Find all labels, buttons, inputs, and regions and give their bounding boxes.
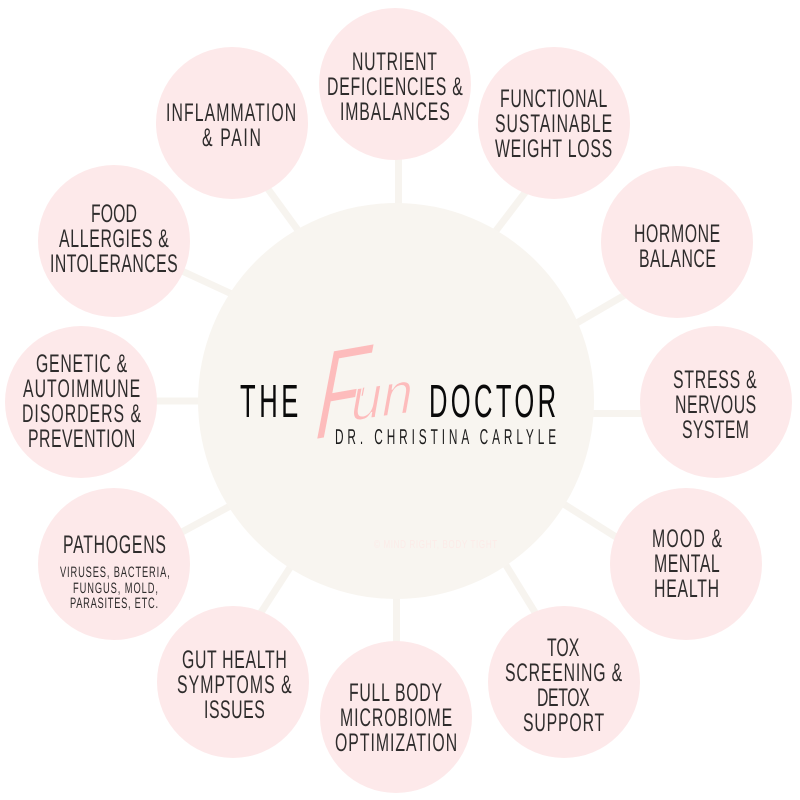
bubble: inflammation: INFLAMMATION xyxy=(166,99,296,127)
bubble: hormone balance: HORMONE xyxy=(634,220,720,248)
bubble: mood: MOOD & xyxy=(652,525,722,553)
bubble: stress: SYSTEM xyxy=(682,416,749,444)
subtitle: DR. CHRISTINA CARLYLE xyxy=(335,425,556,449)
bubble: tox xyxy=(488,606,640,758)
bubble: pathogens xyxy=(38,488,190,640)
bubble: tox: SCREENING & xyxy=(505,659,622,687)
bubble: food allergies: ALLERGIES & xyxy=(59,225,169,253)
bubble: functional weight loss: FUNCTIONAL xyxy=(500,85,607,113)
bubble: stress: STRESS & xyxy=(673,366,757,394)
bubble: food allergies xyxy=(38,165,190,317)
bubble: tox: SUPPORT xyxy=(523,709,604,737)
bubble: nutrient deficiencies: IMBALANCES xyxy=(340,98,450,126)
bubble: pathogens: FUNGUS, MOLD, xyxy=(73,580,158,597)
script word: Fun: F xyxy=(312,317,377,467)
bubble: gut health: GUT HEALTH xyxy=(182,646,287,674)
bubble: pathogens: PARASITES, ETC. xyxy=(70,595,158,612)
bubble: hormone balance xyxy=(601,166,753,318)
bubble: nutrient deficiencies xyxy=(319,8,471,160)
bubble: microbiome: FULL BODY xyxy=(349,679,442,707)
bubble: food allergies: INTOLERANCES xyxy=(50,250,178,278)
heading word: DOCTOR: DOCTOR xyxy=(429,375,556,427)
bubble: mood: HEALTH xyxy=(654,575,719,603)
bubble: inflammation: & PAIN xyxy=(202,124,261,152)
bubble: inflammation xyxy=(156,47,308,199)
bubble: microbiome: OPTIMIZATION xyxy=(335,729,457,757)
logo: The Fun Doctor xyxy=(240,317,556,467)
bubble: nutrient deficiencies: NUTRIENT xyxy=(352,48,437,76)
bubble: pathogens: VIRUSES, BACTERIA, xyxy=(60,564,170,581)
bubble: gut health: SYMPTOMS & xyxy=(177,671,292,699)
script word: Fun xyxy=(312,317,413,467)
center circle xyxy=(198,203,594,599)
script word: Fun: un xyxy=(351,358,413,434)
bubble: gut health xyxy=(157,606,309,758)
heading word: THE: THE xyxy=(240,375,298,427)
bubble: stress xyxy=(640,326,792,478)
bubble: genetic xyxy=(5,326,157,478)
bubble: genetic: PREVENTION xyxy=(28,425,135,453)
bubble: tox: TOX xyxy=(547,634,579,662)
bubble: functional weight loss xyxy=(478,47,630,199)
bubble: genetic: DISORDERS & xyxy=(22,400,141,428)
bubble: mood: MENTAL xyxy=(654,550,720,578)
bubble: genetic: AUTOIMMUNE xyxy=(23,375,140,403)
bubble: tox: DETOX xyxy=(537,684,590,712)
bubble: nutrient deficiencies: DEFICIENCIES & xyxy=(327,73,463,101)
bubble: food allergies: FOOD xyxy=(91,200,137,228)
bubble: hormone balance: BALANCE xyxy=(639,245,716,273)
bubble: mood xyxy=(610,488,762,640)
bubble: functional weight loss: SUSTAINABLE xyxy=(495,110,612,138)
bubble: gut health: ISSUES xyxy=(204,696,265,724)
bubble: microbiome xyxy=(320,641,472,793)
bubble: microbiome: MICROBIOME xyxy=(340,704,452,732)
bubble: pathogens: PATHOGENS xyxy=(63,531,166,559)
spokes xyxy=(152,155,645,645)
bubble: stress: NERVOUS xyxy=(675,391,756,419)
watermark: © MIND RIGHT, BODY TIGHT xyxy=(374,539,497,551)
bubble: genetic: GENETIC & xyxy=(36,350,127,378)
bubble: functional weight loss: WEIGHT LOSS xyxy=(495,135,612,163)
